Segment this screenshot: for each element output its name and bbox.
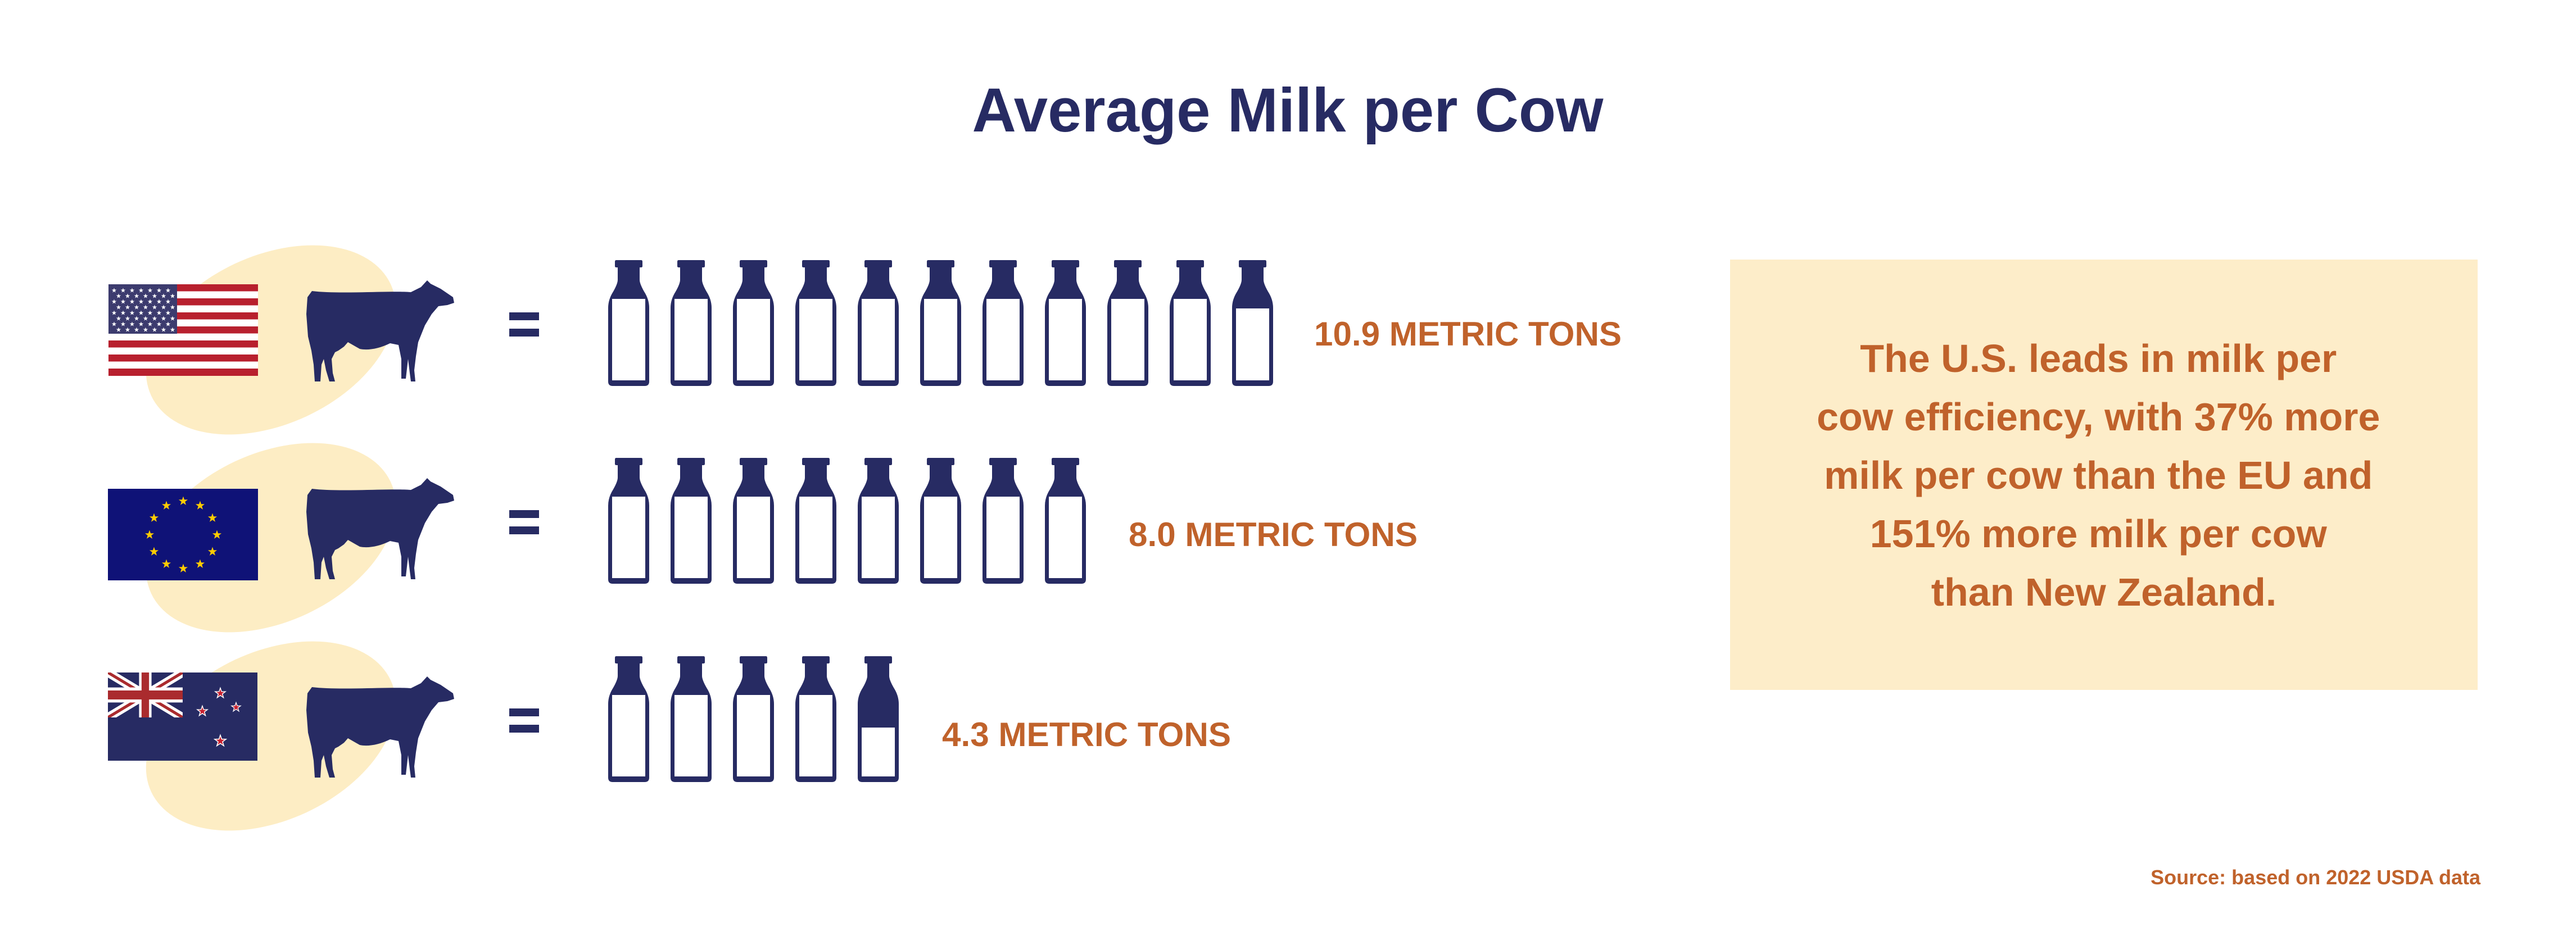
row: New Zealand: [108, 604, 1231, 868]
ellipse background US: [116, 208, 426, 472]
source note: Source: based on 2022 USDA data: [2151, 866, 2481, 889]
label NZ: 4.3 METRIC TONS: [942, 716, 1231, 753]
ellipse background EU: [116, 406, 426, 670]
ellipse background NZ: [116, 604, 426, 868]
bottles US: [608, 260, 1273, 386]
flag: United States: [108, 284, 258, 376]
row: European Union: [108, 406, 1418, 670]
label EU: 8.0 METRIC TONS: [1129, 516, 1418, 553]
row: United States: [108, 208, 1622, 472]
callout box: [1730, 260, 2478, 690]
icon: cow US: [306, 280, 454, 381]
icon: cow EU: [306, 478, 454, 579]
callout text: milk per cow than the EU and: [1824, 453, 2373, 497]
equals sign US: [509, 312, 539, 337]
callout text: 151% more milk per cow: [1870, 512, 2327, 556]
flag: European Union: [108, 489, 258, 580]
bottles NZ: [608, 656, 899, 782]
callout text: than New Zealand.: [1931, 570, 2276, 614]
callout text: cow efficiency, with 37% more: [1817, 395, 2380, 439]
equals sign NZ: [509, 708, 539, 733]
title: Average Milk per Cow: [972, 76, 1604, 145]
label US: 10.9 METRIC TONS: [1314, 315, 1622, 353]
flag: New Zealand: [108, 672, 257, 761]
icon: cow NZ: [306, 676, 454, 778]
bottles EU: [608, 458, 1086, 584]
callout text: The U.S. leads in milk per: [1860, 337, 2337, 380]
equals sign EU: [509, 510, 539, 534]
